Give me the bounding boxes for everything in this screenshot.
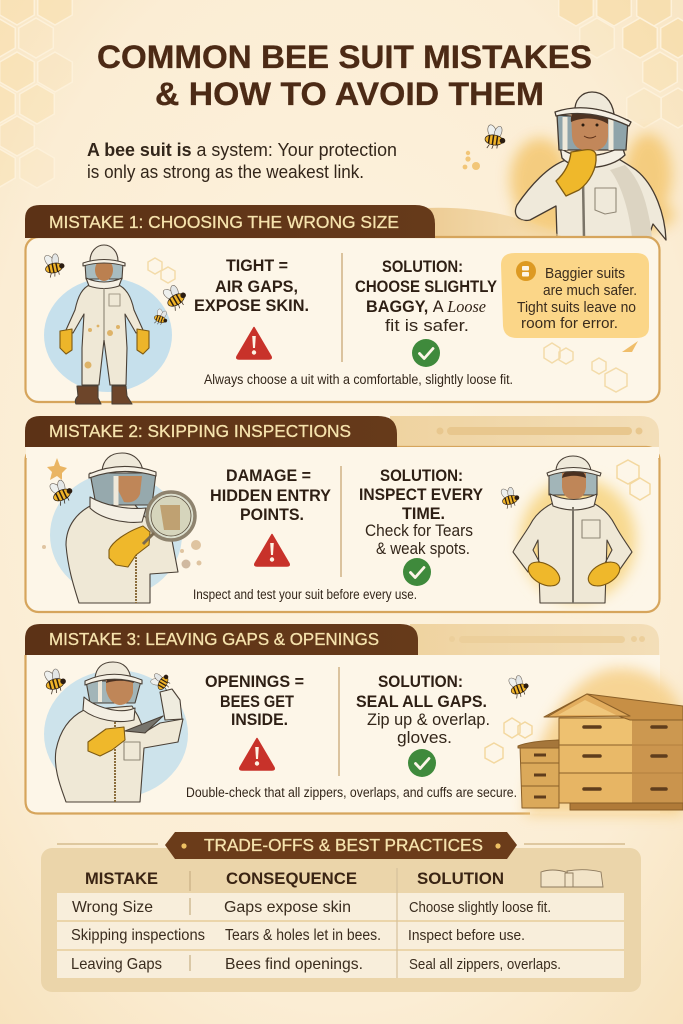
panel body 1 [26,237,660,402]
pill decoration 2 [436,427,642,435]
heading: problem 1 [194,257,309,315]
row 2: Inspect before use. [408,927,525,944]
icon: check 1 [412,339,440,367]
paint dots 2 [42,540,202,568]
row 1: Choose slightly loose fit. [409,899,551,916]
header band 2 [390,416,659,447]
heading 3: MISTAKE 3: LEAVING GAPS & OPENINGS [49,629,379,649]
illustration circle 2 [50,473,182,597]
badge [165,832,517,859]
icon: star 2 [47,458,67,480]
column dividers [190,868,397,978]
solution text 3 [356,673,490,747]
table background [41,848,641,992]
solution text 2: Check for Tears [365,522,473,540]
problem text 3: BEES GET [220,693,294,711]
solution text 2: INSPECT EVERY [359,486,483,504]
icon: folded suit [541,870,603,887]
icon: bee 2 left [47,476,76,507]
panel body 3 [26,655,660,814]
problem text 3: INSIDE. [231,711,288,729]
pencil mark [622,341,638,352]
problem text 3: OPENINGS = [205,673,304,691]
icon: bee 3 right [506,672,531,700]
panel body 2 [26,447,660,612]
row 3: Leaving Gaps [71,956,162,973]
problem text 2: HIDDEN ENTRY [210,487,331,505]
column headings: SOLUTION [417,870,504,888]
badge: TRADE-OFFS & BEST PRACTICES [204,835,483,855]
header band extension 1 [425,208,565,238]
heading 1: MISTAKE 1: CHOOSING THE WRONG SIZE [49,212,399,232]
title: & HOW TO AVOID THEM [155,76,544,112]
icon: warning 2 [255,534,289,566]
title [97,39,592,112]
callout: baggier suits [501,253,649,338]
row 3 [57,951,624,978]
header band 3 [410,624,659,655]
solution text 1: fit is safer. [385,317,469,335]
callout: baggier suits: Tight suits leave no [517,299,636,316]
problem text 3 [205,673,304,729]
glow behind hive [525,668,683,815]
icon: bee 3 left [42,666,68,695]
glow behind right beekeeper [520,478,636,602]
illustration: beekeeper with hand on chin [515,92,666,240]
figure: beekeeper front facing [513,456,632,603]
icon: small bee 1 [152,307,170,327]
intro text: A bee suit is a system: Your protection [87,140,397,160]
row 3: Bees find openings. [225,956,363,973]
icon: bee left 1 [42,251,66,278]
callout: baggier suits: Baggier suits [545,265,625,282]
intro text [87,140,397,182]
solution text 1: SOLUTION: [382,258,463,276]
solution text 2: TIME. [402,505,445,523]
icon: bee on glove [148,669,174,693]
icon: bee near intro [483,123,507,150]
solution text 2 [359,467,483,558]
heading 2: MISTAKE 2: SKIPPING INSPECTIONS [49,421,351,441]
callout: baggier suits: room for error. [521,315,618,332]
table section: trade-offs and best practices [41,832,641,992]
panel: mistake 2 [25,416,660,612]
heading: problem 1: EXPOSE SKIN. [194,297,309,315]
panel: mistake 3 [25,624,683,815]
illustration circle 3 [44,670,188,798]
row 2: Tears & holes let in bees. [225,927,381,944]
header 1 [25,205,435,238]
panel border 3 [26,655,530,814]
solution text 3: gloves. [397,729,452,747]
honeycomb outline 1 [148,258,175,283]
panel: mistake 1 [25,205,660,404]
column headings [85,870,504,888]
row 1: Gaps expose skin [224,899,351,916]
caption 3: Double-check that all zippers, overlaps, and cuffs are secure. [186,785,517,800]
illustration circle 1 [44,278,172,392]
icon: bee right 1 [160,280,190,313]
solution text 1: CHOOSE SLIGHTLY [355,278,497,296]
icon: check 3 [408,749,436,777]
divider 3 [338,667,340,776]
figure: beekeeper checking zippers [55,662,183,802]
honeycomb outlines right 1 [544,343,627,392]
divider 2 [340,466,342,577]
honeycomb pattern: top left [0,0,72,188]
orange paint glow behind top beekeeper [510,133,675,239]
caption 1: Always choose a uit with a comfortable, slightly loose fit. [204,372,513,387]
icon: check 2 [403,558,431,586]
honeycomb outlines 2 [617,460,650,500]
icon: warning 3 [240,738,274,770]
pill decoration 3 [449,636,645,643]
honeycomb pattern: top right [559,0,683,128]
figure: beekeeper with magnifying glass [66,453,195,603]
intro text: is only as strong as the weakest link. [87,162,364,182]
solution text 1 [355,258,497,335]
caption 2: Inspect and test your suit before every use. [193,587,417,602]
column headings: MISTAKE [85,870,158,888]
row 2: Skipping inspections [71,927,205,944]
solution text 1: BAGGY, A Loose [366,297,486,316]
problem text 2: POINTS. [240,506,304,524]
row 3: Seal all zippers, overlaps. [409,956,561,973]
problem text 2 [210,467,331,524]
divider 1 [341,253,343,362]
row 2 [57,922,624,949]
decorative dots beside bee [463,151,480,170]
icon: warning 1 [237,328,271,359]
solution text 2: SOLUTION: [380,467,463,485]
rule left [57,843,158,845]
solution text 3: SEAL ALL GAPS. [356,693,487,711]
heading: problem 1: TIGHT = [226,257,288,275]
row 1: Wrong Size [72,899,153,916]
illustration: beehive [518,694,683,810]
heading: problem 1: AIR GAPS, [215,278,298,296]
figure: full body beekeeper [60,245,149,404]
callout: baggier suits: are much safer. [543,282,637,299]
solution text 2: & weak spots. [376,540,470,558]
header 3 [25,624,418,655]
problem text 2: DAMAGE = [226,467,311,485]
icon: bee 2 right [499,484,521,509]
solution text 3: SOLUTION: [378,673,463,691]
title: COMMON BEE SUIT MISTAKES [97,39,592,75]
header 2 [25,416,397,447]
rule right [524,843,625,845]
column headings: CONSEQUENCE [226,870,357,888]
row 1 [57,893,624,920]
solution text 3: Zip up & overlap. [367,711,490,729]
honeycomb outlines 3 [485,718,532,763]
